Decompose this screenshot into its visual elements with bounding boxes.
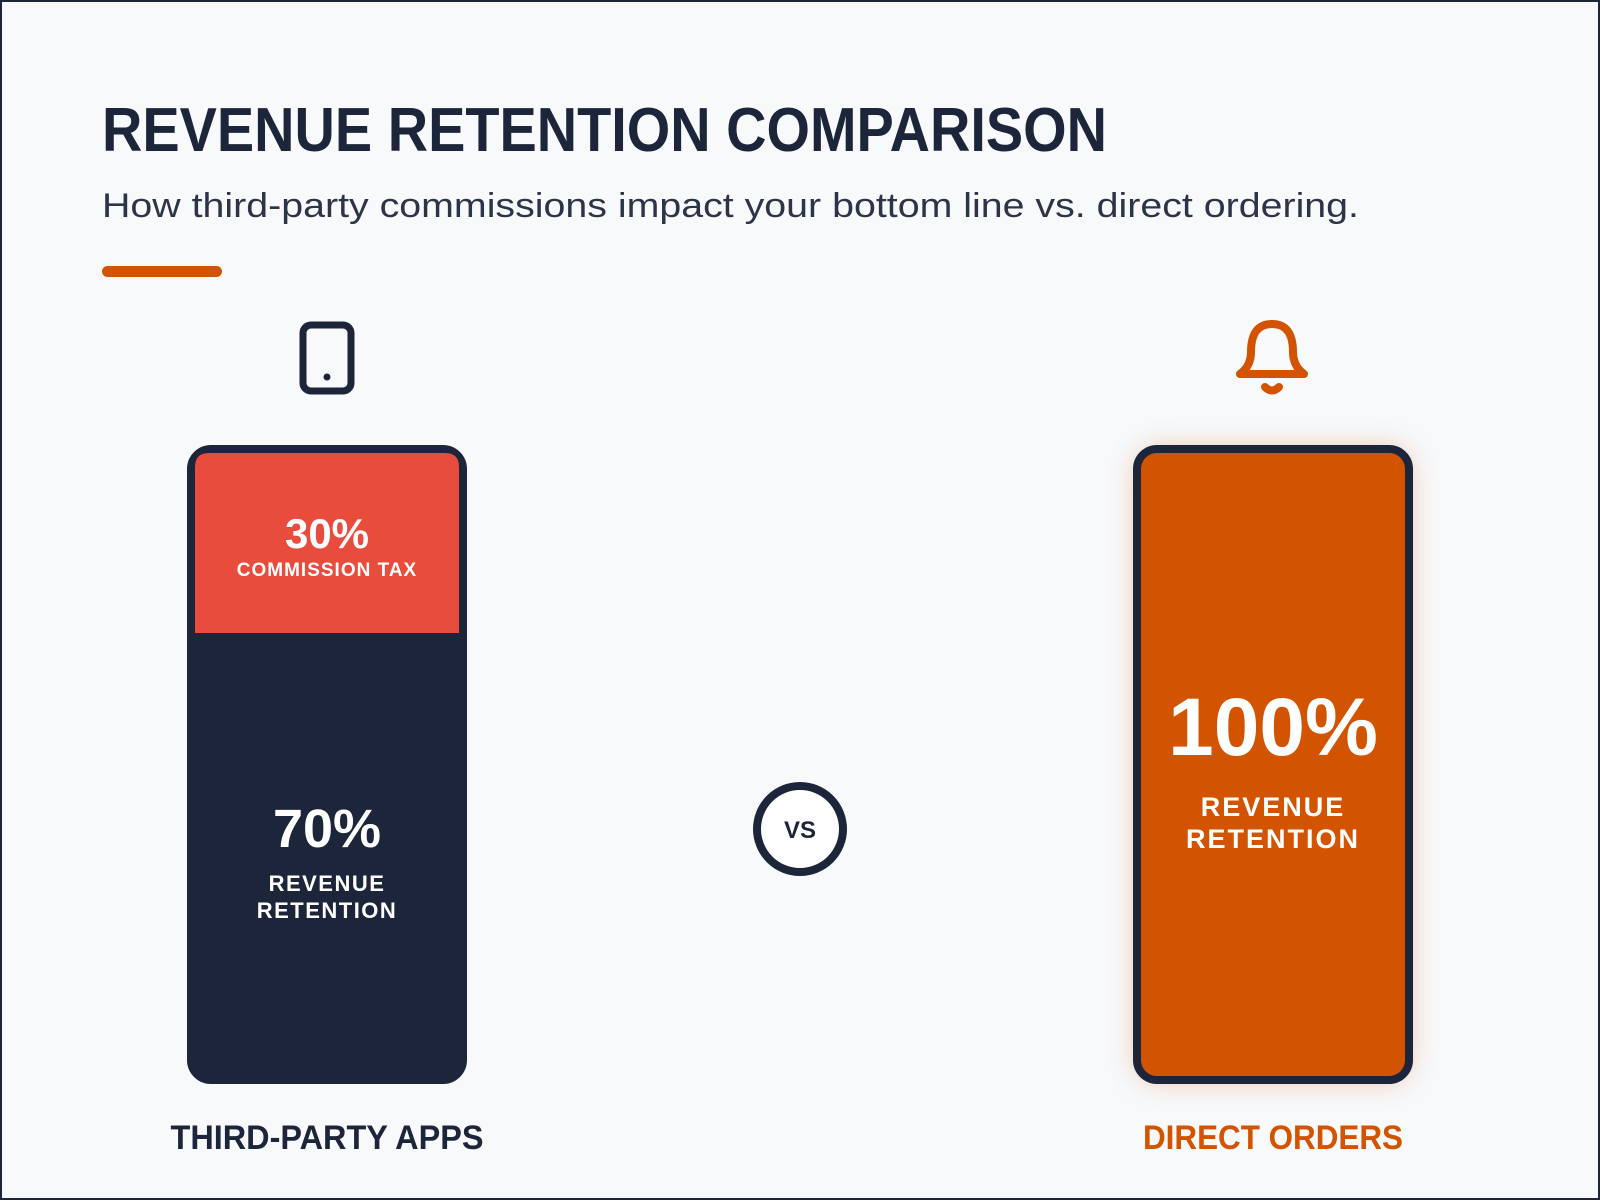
commission segment bbox=[195, 453, 459, 633]
panel: third-party bar: RETENTION bbox=[257, 898, 397, 923]
panel: direct bar: RETENTION bbox=[1186, 824, 1360, 854]
subtitle: How third-party commissions impact your bottom line vs. direct ordering. bbox=[102, 187, 1359, 225]
text: commission tax: COMMISSION TAX bbox=[237, 560, 417, 581]
icon: bell bbox=[1240, 324, 1304, 390]
text: revenue retention: REVENUE bbox=[269, 871, 385, 896]
text: 30%: 30% bbox=[285, 510, 369, 557]
vs circle: VS bbox=[784, 817, 816, 844]
title: REVENUE RETENTION COMPARISON bbox=[102, 96, 1107, 165]
accent bar bbox=[102, 266, 222, 277]
vs circle bbox=[757, 786, 843, 872]
label: third-party apps: THIRD-PARTY APPS bbox=[170, 1119, 484, 1157]
panel: direct bar bbox=[1137, 449, 1409, 1080]
text: 70%: 70% bbox=[273, 799, 381, 859]
text: 100%: 100% bbox=[1168, 682, 1378, 773]
text: revenue retention: REVENUE bbox=[1201, 792, 1345, 822]
icon: phone bbox=[303, 325, 351, 391]
label: direct orders: DIRECT ORDERS bbox=[1143, 1119, 1403, 1157]
panel: third-party bar bbox=[191, 449, 463, 1080]
